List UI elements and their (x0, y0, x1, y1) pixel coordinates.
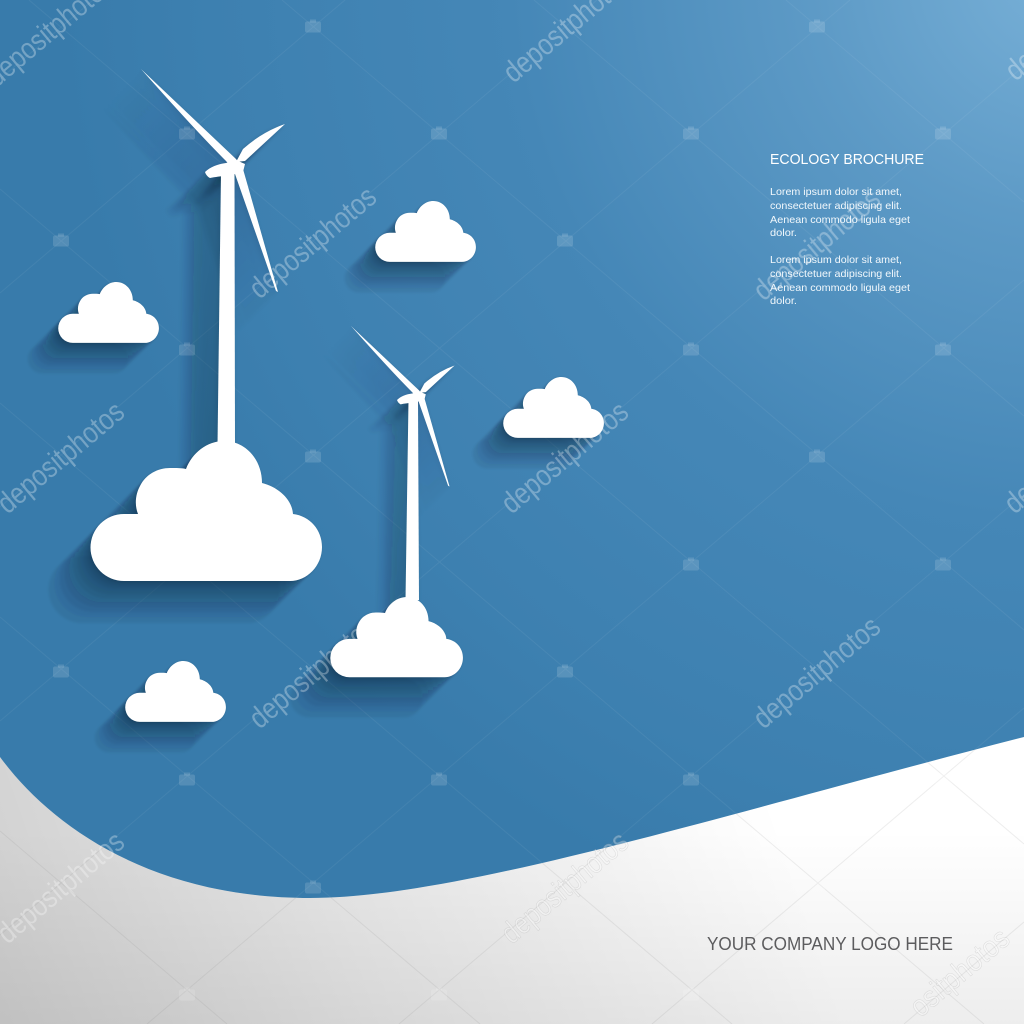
icon: small cloud left (58, 282, 159, 343)
icon: small cloud right (503, 377, 604, 438)
depositphotos watermarks: depositphotos (747, 610, 887, 735)
large cloud (90, 441, 322, 581)
text block: first paragraph (770, 186, 910, 239)
text block: second paragraph (770, 254, 910, 307)
medium cloud (330, 597, 463, 677)
text block: first paragraph: consectetuer adipiscing elit. (770, 200, 902, 212)
large turbine (141, 69, 285, 446)
text block: first paragraph: Aenean commodo ligula eget (770, 214, 910, 226)
heading: Ecology Brochure: ECOLOGY BROCHURE (770, 152, 924, 168)
text block: second paragraph: dolor. (770, 295, 797, 307)
text block: first paragraph: dolor. (770, 227, 797, 239)
icon: large wind turbine on large cloud (90, 69, 322, 581)
text block: first paragraph: Lorem ipsum dolor sit amet, (770, 186, 902, 198)
small turbine (351, 326, 455, 600)
faint watermark lattice lines on panel (0, 750, 1024, 1024)
depositphotos watermarks: depositphotos (495, 825, 635, 950)
depositphotos watermarks: depositphotos (243, 180, 383, 305)
text block: second paragraph: consectetuer adipiscing elit. (770, 268, 902, 280)
depositphotos watermarks: depositphotos (747, 182, 887, 307)
depositphotos watermarks: depositphotos (243, 610, 383, 735)
text block: second paragraph: Lorem ipsum dolor sit amet, (770, 254, 902, 266)
icon: small cloud top centre (375, 201, 476, 262)
company logo placeholder: YOUR COMPANY LOGO HERE (707, 934, 953, 954)
text block: second paragraph: Aenean commodo ligula eget (770, 282, 910, 294)
long shadows of clouds (28, 201, 604, 752)
depositphotos watermarks: depositphotos (495, 395, 635, 520)
icon: small cloud bottom left (125, 661, 226, 722)
wavy white-grey bottom panel (0, 737, 1024, 1024)
icon: small wind turbine on medium cloud (330, 326, 463, 677)
long shadows of turbines (103, 69, 454, 628)
